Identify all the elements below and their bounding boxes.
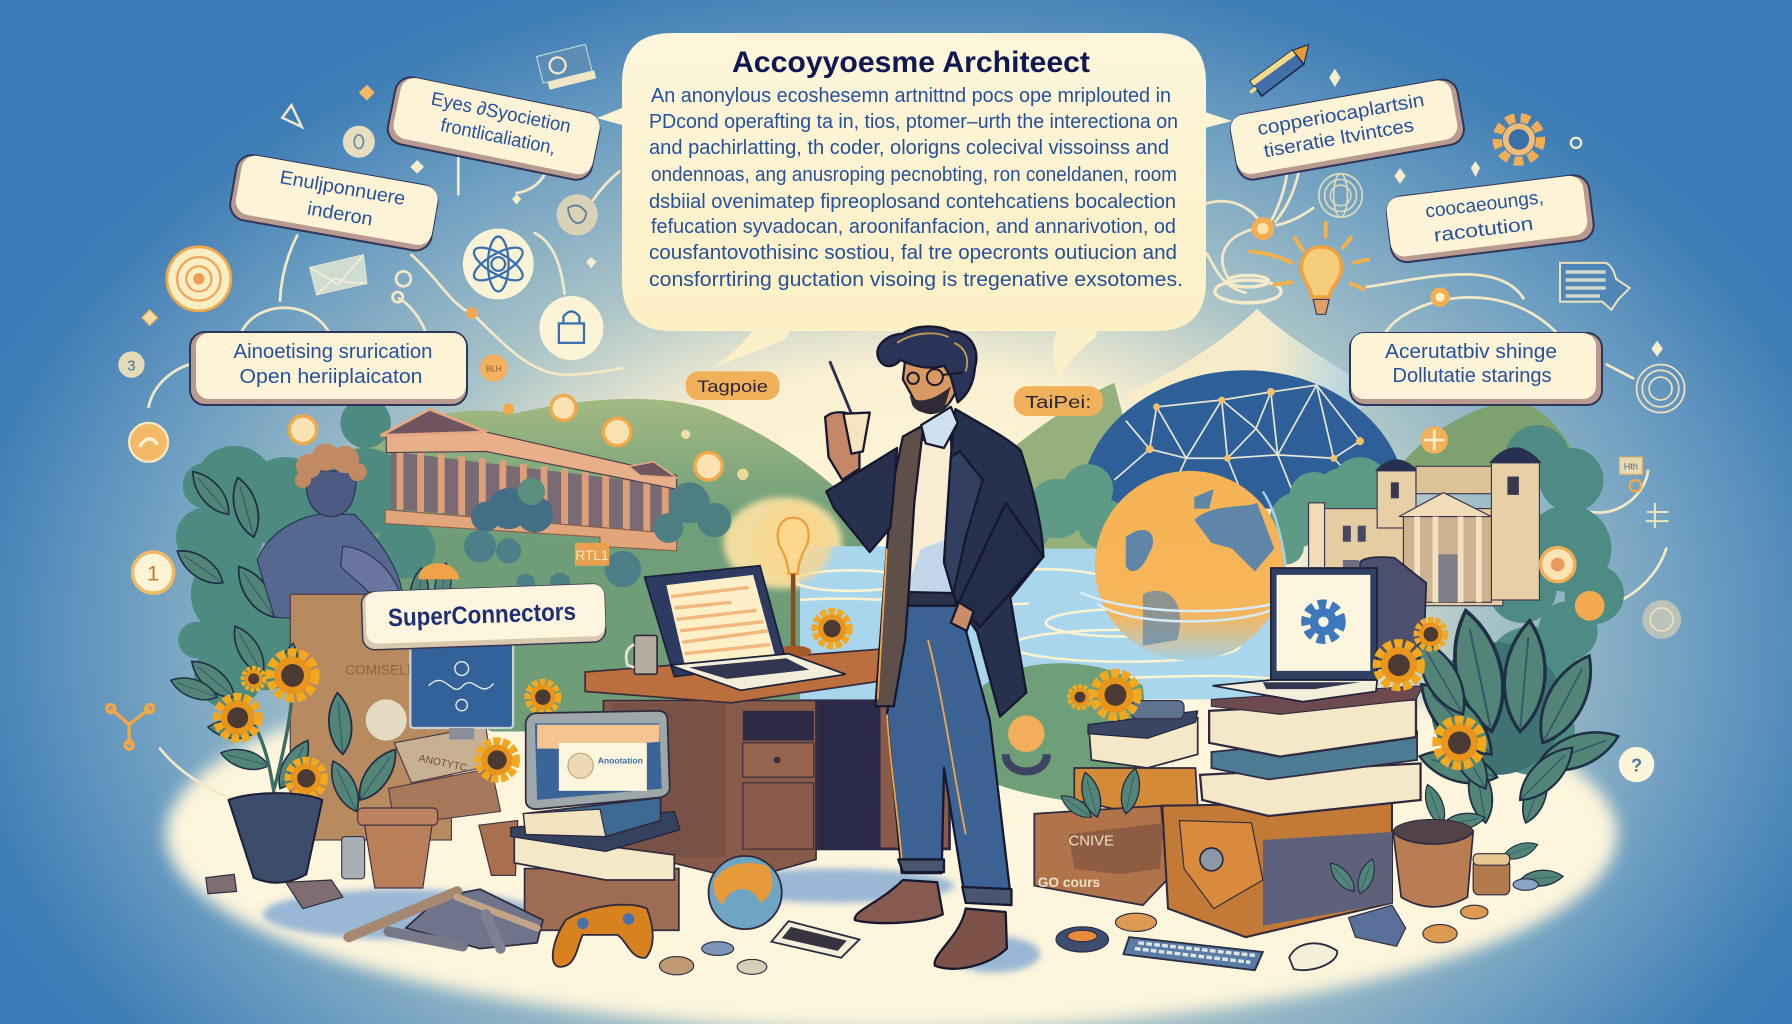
wooden crate bbox=[290, 594, 451, 840]
dome bbox=[1018, 309, 1403, 565]
bushes around dome bbox=[1018, 464, 1339, 565]
badge taipei: TaiPei: bbox=[1025, 392, 1091, 412]
label: eyes association bbox=[385, 75, 602, 183]
orange case bbox=[1162, 802, 1392, 937]
stone slab lower bbox=[389, 768, 501, 825]
crate text: COMISELI bbox=[345, 662, 411, 677]
desk sunflower bbox=[815, 611, 849, 646]
laptop keyboard bbox=[689, 658, 809, 679]
label: acerutatbiv: Dollutatie starings bbox=[1392, 365, 1552, 387]
hill sign: RTL1 bbox=[575, 548, 609, 563]
icon: emblem bbox=[1642, 600, 1681, 639]
sunflower one bbox=[217, 697, 259, 739]
label: copper: tiseratie ltvintces bbox=[1262, 115, 1416, 162]
left tower bbox=[1375, 459, 1418, 528]
right plant bbox=[1325, 606, 1624, 907]
left shoe bbox=[855, 880, 943, 923]
ground shadows bbox=[263, 869, 1040, 973]
orange book bbox=[1074, 768, 1198, 816]
neck and face bbox=[903, 349, 961, 413]
desk cavity bbox=[800, 699, 951, 850]
globe continents bbox=[1126, 489, 1274, 646]
icon: ring emblem bbox=[1637, 365, 1685, 413]
horseshoe ring bbox=[1006, 754, 1047, 771]
big leaves bbox=[1406, 606, 1624, 826]
left landscape bbox=[343, 399, 869, 731]
case lock bbox=[1200, 848, 1223, 871]
orange emblem bbox=[1008, 715, 1045, 752]
statue body bbox=[257, 514, 403, 623]
sunflowers bbox=[1069, 673, 1137, 717]
laptop frame bbox=[1271, 568, 1377, 680]
label: entrepreneur: Enuljponnuere bbox=[278, 167, 407, 210]
label: coocaeoungs: coocaeoungs, bbox=[1424, 187, 1545, 223]
wing windows bbox=[1343, 526, 1366, 589]
small can bbox=[342, 837, 365, 879]
disc bbox=[1056, 927, 1109, 952]
panel body text: fefucation syvadocan, aroonifanfacion, and annarivotion, od bbox=[651, 216, 1176, 238]
label: annotating bbox=[190, 332, 467, 405]
icon: question mark: ? bbox=[1631, 754, 1642, 775]
monitor frame bbox=[410, 642, 513, 728]
desk side panel bbox=[611, 703, 726, 857]
statue hair bbox=[295, 443, 367, 488]
right foliage bbox=[1319, 402, 1624, 775]
shirt blue shading bbox=[905, 537, 955, 594]
plant stem bbox=[251, 680, 293, 794]
hill badge bbox=[418, 563, 459, 579]
globe rings bbox=[1080, 491, 1303, 621]
monitor two card: Anootation bbox=[598, 755, 643, 765]
upper storey bbox=[1416, 466, 1491, 494]
rubble sticks bbox=[349, 891, 537, 949]
front hill bbox=[394, 533, 754, 731]
icon: orange coin bbox=[480, 354, 507, 382]
label: acerutatbiv: Acerutatbiv shinge bbox=[1385, 341, 1557, 363]
main text panel bbox=[597, 33, 1232, 331]
label: entrepreneur: inderon bbox=[306, 198, 374, 231]
monitor two bbox=[526, 711, 670, 809]
plant leaves bbox=[168, 621, 405, 816]
sunflower four bbox=[243, 668, 265, 690]
statue face bbox=[306, 471, 357, 517]
game controller bbox=[553, 905, 653, 967]
keyboard bbox=[1123, 937, 1263, 970]
icon: diamond bbox=[359, 85, 375, 101]
sunflower six bbox=[478, 741, 516, 779]
panel body text: and pachirlatting, th coder, olorigns colecival vissoinss and bbox=[649, 137, 1169, 159]
bubble tails below panel bbox=[711, 326, 1097, 382]
jar bbox=[1473, 854, 1510, 895]
laptop bbox=[645, 566, 846, 690]
hair highlights bbox=[897, 333, 967, 371]
box label: GO cours bbox=[1038, 875, 1101, 890]
icon: small rings bbox=[393, 271, 411, 302]
panel body text bbox=[649, 85, 1183, 291]
central pediment bbox=[1399, 493, 1491, 517]
lamp glow bbox=[754, 504, 832, 582]
panel title: Accoyyoesme Architeect bbox=[732, 46, 1090, 79]
pant cuffs bbox=[898, 859, 1011, 905]
icon: target bbox=[167, 247, 231, 311]
icon: number one: 1 bbox=[147, 561, 159, 586]
coat sleeve right bbox=[959, 503, 1043, 627]
icon: network bbox=[107, 705, 154, 749]
hill sign bbox=[575, 543, 609, 566]
icon: number three bbox=[118, 351, 145, 378]
classical building bbox=[1309, 447, 1605, 621]
person bbox=[825, 327, 1043, 969]
stone slabs bbox=[394, 726, 491, 783]
desk accessories right bbox=[1056, 879, 1538, 970]
laptop base bbox=[670, 654, 846, 690]
panel right tail bbox=[1205, 112, 1232, 128]
desk drawer bbox=[743, 711, 814, 849]
lower hill bbox=[983, 663, 1154, 800]
label: eyes association: frontlicaliation, bbox=[439, 115, 557, 159]
geodesic sphere bbox=[1086, 370, 1403, 509]
label: eyes association: Eyes ∂Syocietion bbox=[429, 89, 573, 138]
tablet bbox=[771, 921, 859, 958]
lamp bulb bbox=[778, 518, 809, 574]
icon: rings under connector bbox=[1215, 275, 1281, 303]
temple shadow wall bbox=[391, 451, 674, 535]
laptop keyboard bbox=[1263, 682, 1360, 689]
label: superconnectors bbox=[361, 584, 606, 650]
cone above dome bbox=[1126, 309, 1385, 417]
coins bbox=[1115, 905, 1488, 943]
box flap bbox=[1069, 823, 1163, 874]
terracotta pot right bbox=[1393, 819, 1473, 907]
small sign and ring bbox=[1006, 715, 1047, 771]
stacked stones bbox=[389, 726, 501, 825]
ground island bbox=[166, 640, 1617, 1024]
controller buttons bbox=[577, 913, 634, 929]
laptop base bbox=[1213, 680, 1377, 702]
icon: envelope bbox=[310, 255, 367, 295]
laptop gear bbox=[1306, 605, 1341, 639]
statue bbox=[257, 443, 403, 623]
coat bbox=[826, 409, 1043, 717]
right tower bbox=[1489, 447, 1542, 600]
left icons bbox=[107, 44, 603, 749]
back hill bbox=[343, 399, 869, 731]
monitor two with books bbox=[511, 711, 680, 930]
monitor diagram bbox=[429, 662, 494, 711]
icon: orange coin: BLH bbox=[486, 364, 502, 373]
desk items bbox=[626, 504, 849, 690]
case right side bbox=[1263, 832, 1392, 926]
lamp glow on hill bbox=[723, 497, 842, 589]
icon: triangle bbox=[282, 105, 302, 127]
plus badge bbox=[1421, 426, 1448, 454]
panel body text: cousfantovothisinc sostiou, fal tre opecronts outiucion and bbox=[649, 242, 1177, 264]
icon: chat bubble bbox=[1560, 263, 1630, 310]
icon: film camera bbox=[537, 44, 596, 91]
small slab bbox=[1131, 701, 1184, 719]
temple pediment bbox=[381, 409, 487, 435]
label: copper: copperiocaplartsin bbox=[1256, 90, 1426, 140]
icon: ring bbox=[1571, 138, 1581, 148]
temple rear pediment bbox=[629, 462, 677, 478]
icon: label and symbols: Hth bbox=[1624, 462, 1638, 472]
statue arm bbox=[341, 546, 402, 606]
connector lines bbox=[149, 158, 1666, 802]
orange dots on hills bbox=[289, 395, 749, 480]
rubble rocks bbox=[406, 889, 543, 949]
sunflower five bbox=[527, 682, 558, 713]
desk bbox=[585, 649, 951, 880]
mouse bbox=[1289, 943, 1337, 970]
globe sphere bbox=[1095, 471, 1285, 661]
badge taspoie: Tagpoie bbox=[697, 377, 768, 396]
box leaves bbox=[1057, 767, 1144, 823]
crate logo bbox=[366, 699, 407, 741]
low foliage bbox=[1325, 838, 1564, 896]
icon: lock bbox=[539, 296, 603, 360]
glasses bbox=[907, 369, 963, 385]
network nodes bbox=[1146, 388, 1364, 462]
left book stack bbox=[1069, 673, 1198, 816]
badge taipei bbox=[1014, 386, 1103, 416]
label: annotating: Ainoetising srurication bbox=[234, 341, 432, 363]
case front flap bbox=[1179, 821, 1263, 909]
top book bbox=[1209, 699, 1416, 757]
small pot bbox=[479, 821, 518, 875]
box body bbox=[1034, 806, 1167, 905]
sunflower two bbox=[270, 653, 315, 698]
terracotta pot bbox=[358, 808, 438, 888]
hair bbox=[877, 327, 976, 402]
cardboard box bbox=[1034, 767, 1167, 905]
right shoe bbox=[935, 909, 1007, 969]
icon: light bulb bbox=[1250, 223, 1368, 314]
label: coocaeoungs: racotution bbox=[1433, 214, 1534, 247]
right hills bbox=[983, 383, 1154, 800]
coins left bbox=[659, 942, 767, 975]
panel body text: ondennoas, ang anusroping pecnobting, ron coneldanen, room bbox=[651, 164, 1177, 186]
label: entrepreneur bbox=[228, 153, 440, 253]
left pavilion bbox=[1309, 503, 1325, 603]
left plants bbox=[168, 621, 558, 816]
sunflowers bbox=[1377, 620, 1482, 766]
panel body text: PDcond operafting ta in, tios, ptomer–urth the interectiona on bbox=[649, 111, 1178, 133]
cup bbox=[843, 413, 870, 454]
city badges bbox=[686, 371, 1103, 416]
monitor two card bbox=[559, 743, 647, 791]
laptop display bbox=[1277, 575, 1370, 671]
middle book bbox=[1211, 731, 1417, 779]
rubble pile bbox=[206, 874, 543, 949]
lower book bbox=[511, 811, 680, 880]
monitor with diagram bbox=[410, 642, 513, 739]
belt bbox=[905, 592, 955, 606]
connector node bbox=[466, 307, 478, 319]
monitor two screen bbox=[535, 723, 662, 800]
top book cover bbox=[1211, 686, 1423, 714]
dark pot bbox=[229, 793, 322, 883]
pants bbox=[887, 600, 1011, 903]
monitor two frame bbox=[526, 711, 670, 809]
label: copper bbox=[1229, 77, 1466, 182]
building wings bbox=[1309, 509, 1503, 606]
left foliage bbox=[172, 395, 749, 709]
pot plant leaves bbox=[1420, 782, 1486, 833]
connector nodes bbox=[1251, 217, 1450, 307]
shirt bbox=[905, 430, 955, 594]
stone slab text: ANOTYTC bbox=[418, 753, 468, 774]
panel body text: An anonylous ecoshesemn artnittnd pocs ope mriplouted in bbox=[651, 85, 1171, 107]
water bbox=[794, 546, 1286, 699]
temple entablature bbox=[386, 432, 677, 489]
crate body bbox=[290, 594, 451, 840]
pots bbox=[229, 793, 518, 888]
network lines bbox=[1114, 385, 1366, 503]
desk top bbox=[585, 649, 880, 703]
icon: pencil bbox=[1250, 45, 1309, 96]
label: annotating: Open heriiplaicaton bbox=[240, 366, 422, 388]
upper book bbox=[523, 798, 661, 837]
scalloped bushes bbox=[1319, 425, 1624, 775]
lower box bbox=[525, 869, 679, 930]
temple columns bbox=[400, 449, 665, 533]
foliage leaves bbox=[172, 465, 454, 624]
monitor stand bbox=[449, 728, 474, 739]
icon: label and symbols bbox=[1619, 457, 1669, 528]
small cube bbox=[1349, 905, 1406, 946]
icon: circle badge bbox=[343, 126, 375, 158]
scalloped bush mass bbox=[176, 398, 435, 709]
card behind laptop bbox=[1360, 557, 1426, 669]
labels bbox=[190, 75, 1602, 650]
small stones bbox=[206, 874, 343, 909]
laptop lid bbox=[645, 566, 786, 677]
icon: orange target lower bbox=[129, 423, 168, 462]
right book stack and case bbox=[1162, 686, 1423, 937]
icon: question mark bbox=[1619, 747, 1654, 782]
book cover bbox=[1088, 711, 1198, 738]
laptop screen bbox=[666, 575, 775, 664]
globe bbox=[1080, 471, 1303, 661]
orange target on foliage bbox=[1541, 547, 1575, 582]
label: acerutatbiv bbox=[1350, 333, 1602, 405]
temple steps bbox=[385, 510, 677, 551]
icon: number three: 3 bbox=[127, 358, 136, 374]
portico columns bbox=[1403, 517, 1491, 602]
label: coocaeoungs bbox=[1385, 174, 1595, 264]
desk body bbox=[603, 701, 816, 880]
beard bbox=[910, 386, 951, 413]
hill bushes bbox=[464, 530, 641, 593]
small globe continents bbox=[713, 863, 773, 905]
icon: atom bbox=[463, 229, 534, 299]
sunflower three bbox=[288, 760, 325, 797]
small earth globe bbox=[709, 856, 782, 929]
badge taspoie bbox=[686, 371, 779, 400]
right hand bbox=[951, 602, 974, 631]
sparkles bbox=[410, 69, 1663, 357]
icon: network sphere bbox=[1319, 174, 1362, 217]
laptop text lines bbox=[671, 587, 770, 654]
right hill bbox=[1397, 402, 1577, 480]
icon: number one bbox=[133, 552, 174, 593]
cream book bbox=[1089, 718, 1198, 768]
panel body text: dsbiial ovenimatep fipreoplosand contehcatiens bocalection bbox=[649, 191, 1176, 213]
icon: diamond lower bbox=[142, 310, 158, 326]
right icons bbox=[410, 45, 1685, 782]
distant hill bbox=[994, 383, 1143, 549]
box text: CNIVE bbox=[1069, 834, 1114, 850]
temple bushes bbox=[471, 478, 731, 543]
orange badge on foliage bbox=[1575, 591, 1605, 621]
mug bbox=[626, 635, 657, 674]
blue disc bbox=[1513, 879, 1538, 890]
lamp base bbox=[777, 646, 811, 657]
collar bbox=[921, 407, 958, 448]
lamp stem bbox=[791, 574, 795, 647]
panel body text: consforrtiring guctation visoing is tregenative exsotomes. bbox=[649, 269, 1183, 291]
third book bbox=[1200, 763, 1421, 816]
label: superconnectors: SuperConnectors bbox=[388, 598, 576, 632]
icon: gear bbox=[1497, 118, 1541, 161]
temple bbox=[381, 409, 731, 593]
desk right panel bbox=[880, 702, 949, 848]
raised hand bbox=[825, 412, 859, 480]
straw bbox=[830, 361, 851, 414]
icon: face medallion bbox=[557, 194, 598, 235]
right laptop bbox=[1213, 557, 1426, 702]
monitor two stripes bbox=[537, 725, 659, 749]
